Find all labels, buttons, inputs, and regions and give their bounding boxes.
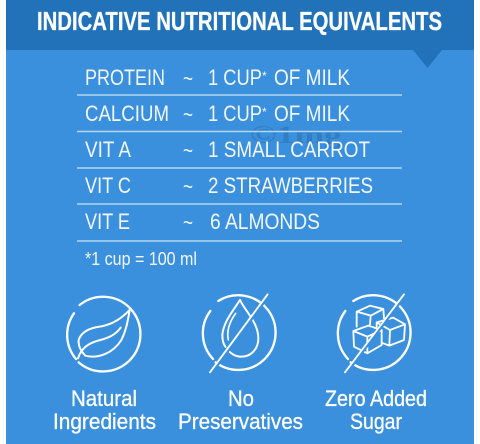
row: vitamin A: VIT A <box>85 137 131 162</box>
row: calcium: CALCIUM <box>85 101 169 126</box>
row: protein: 1 CUP <box>208 65 262 90</box>
row: vitamin A: ~ <box>183 138 193 163</box>
row: calcium: OF MILK <box>274 101 350 126</box>
icon: sugar cubes with slash <box>338 294 411 372</box>
row: protein: * <box>262 69 267 83</box>
row: vitamin E <box>85 209 320 235</box>
header band with pointer <box>6 0 474 68</box>
row: vitamin C: VIT C <box>85 173 131 198</box>
row: vitamin C: 2 STRAWBERRIES <box>208 173 373 198</box>
row: vitamin C <box>85 173 373 199</box>
row: vitamin C: ~ <box>183 174 193 199</box>
row: vitamin E: ~ <box>183 210 193 235</box>
row: protein: ~ <box>183 66 193 91</box>
label: zero added sugar: Sugar <box>350 409 402 434</box>
label: no preservatives: Preservatives <box>178 409 303 434</box>
label: no preservatives <box>178 386 303 434</box>
row: vitamin A <box>85 137 370 163</box>
row: protein <box>85 65 350 91</box>
icon: leaf <box>67 297 140 371</box>
footnote: *1 cup = 100 ml <box>85 249 197 269</box>
label: zero added sugar <box>325 386 427 434</box>
icon: droplet with slash <box>203 294 276 372</box>
row: calcium <box>85 101 350 127</box>
row: vitamin E: 6 ALMONDS <box>210 209 320 234</box>
table: nutritional equivalents <box>85 65 373 235</box>
watermark: ©1mg <box>250 122 343 149</box>
row: vitamin E: VIT E <box>85 209 130 234</box>
label: natural ingredients: Natural <box>71 386 137 411</box>
label: natural ingredients <box>53 386 156 434</box>
row: calcium: ~ <box>183 102 193 127</box>
label: zero added sugar: Zero Added <box>325 386 427 411</box>
row: calcium: 1 CUP <box>208 101 262 126</box>
label: no preservatives: No <box>228 386 254 411</box>
row: protein: PROTEIN <box>85 65 165 90</box>
row: protein: OF MILK <box>274 65 350 90</box>
row: vitamin A: 1 SMALL CARROT <box>208 137 370 162</box>
label: natural ingredients: Ingredients <box>53 409 156 434</box>
row: calcium: * <box>262 105 267 119</box>
